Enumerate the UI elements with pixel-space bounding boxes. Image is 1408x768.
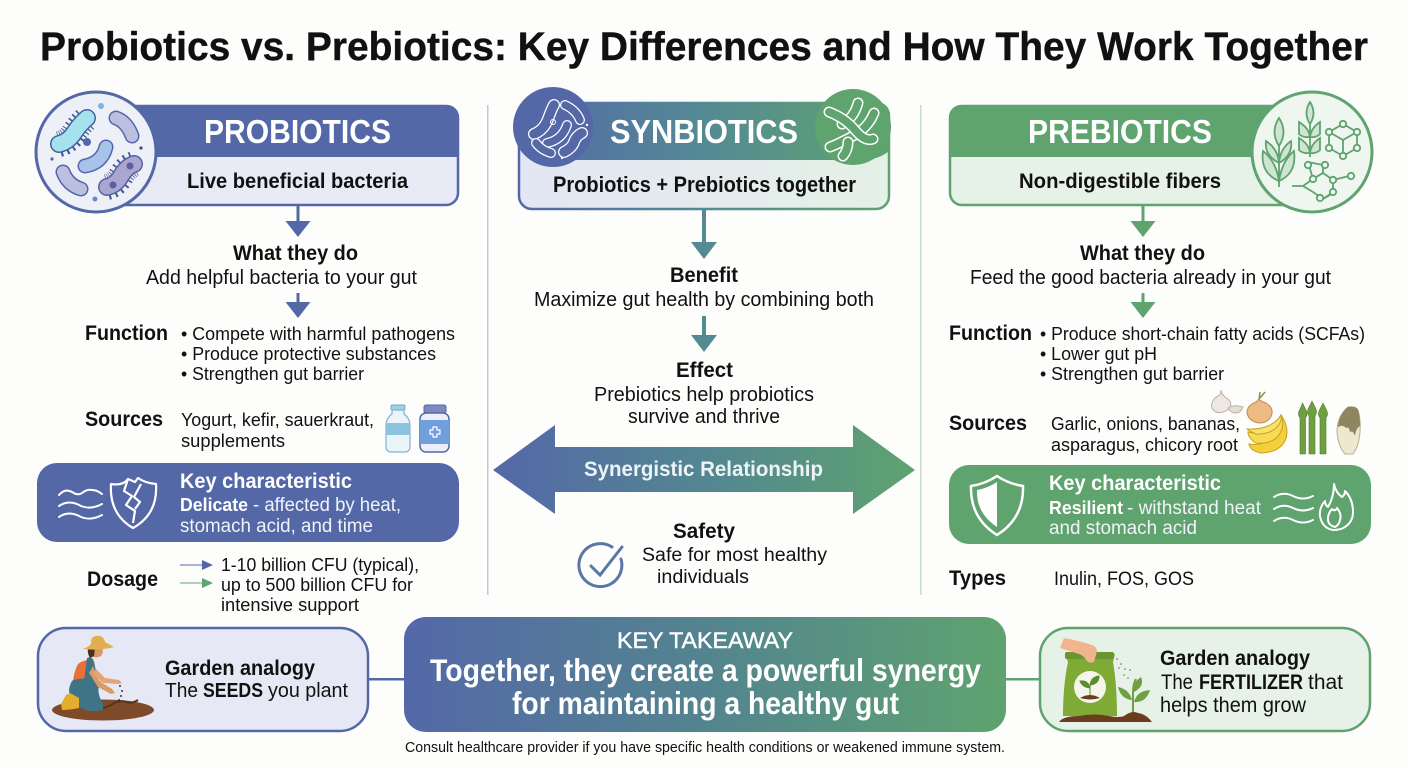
key characteristic card: Resilient: [1049, 497, 1123, 518]
safety text: Safe for most healthy: [642, 545, 828, 566]
icon: fiber outline circle: [815, 89, 891, 165]
arrow: synergistic relationship: Synergistic Relationship: [584, 458, 823, 481]
sources section: asparagus, chicory root: [1051, 434, 1238, 455]
icon: waves: [1274, 494, 1313, 522]
dosage section: 1-10 billion CFU (typical),: [221, 554, 419, 575]
synbiotics header card: [513, 87, 891, 209]
arrow: what they do to function: [1130, 293, 1156, 318]
function section: • Lower gut pH: [1040, 343, 1157, 364]
icon: flame: [1320, 484, 1353, 530]
types section: Types: [949, 567, 1006, 590]
arrow: benefit to effect: [691, 316, 717, 352]
probiotics header card: [110, 105, 459, 205]
synbiotics heading: SYNBIOTICS: [610, 113, 798, 150]
panel: key takeaway: KEY TAKEAWAY: [617, 628, 793, 653]
safety text: individuals: [657, 567, 749, 588]
sources section: [949, 390, 1360, 455]
icon: plants and molecules circle: [1252, 92, 1372, 212]
prebiotics header card: [949, 105, 1298, 205]
divider left: [487, 105, 488, 595]
title: Probiotics vs. Prebiotics: Key Differences and How They Work Together: [40, 25, 1368, 69]
dosage section: Dosage: [87, 568, 158, 591]
probiotics heading: PROBIOTICS: [204, 113, 391, 150]
key characteristic card: and stomach acid: [1049, 518, 1197, 539]
icon: check circle: [579, 544, 622, 587]
left analogy text: The: [165, 679, 198, 702]
types section: Inulin, FOS, GOS: [1054, 569, 1194, 590]
what they do text: Add helpful bacteria to your gut: [146, 267, 417, 289]
left analogy text: you plant: [268, 679, 348, 702]
what they do text: Feed the good bacteria already in your gut: [970, 267, 1331, 289]
icon: fertilizer bag and seedling: [1059, 638, 1152, 722]
arrow: header to what they do: [1130, 205, 1156, 237]
panel: key takeaway: [404, 617, 1006, 732]
function section: Function: [949, 322, 1032, 345]
connector: takeaway to right analogy: [1006, 678, 1040, 680]
icon: bananas: [1247, 415, 1287, 453]
icon: onion: [1247, 392, 1272, 423]
right analogy text: [1160, 646, 1343, 717]
icon: asparagus: [1298, 401, 1328, 454]
right analogy text: helps them grow: [1160, 694, 1307, 717]
synbiotics subtitle: Probiotics + Prebiotics together: [553, 172, 856, 197]
icon: cracked shield: [111, 478, 156, 528]
icon: chicory: [1337, 407, 1360, 454]
key characteristic card: Key characteristic: [1049, 472, 1221, 495]
function section: • Compete with harmful pathogens: [181, 323, 455, 344]
footer note: Consult healthcare provider if you have specific health conditions or weakened immune system.: [405, 740, 1005, 756]
probiotics subtitle: Live beneficial bacteria: [187, 170, 408, 193]
safety heading: Safety: [673, 520, 735, 543]
key characteristic card: - affected by heat,: [253, 495, 401, 516]
icon: gardener planting seeds: [52, 636, 154, 720]
function section: Function: [85, 322, 168, 345]
dosage section: intensive support: [221, 594, 359, 615]
function section: • Produce short-chain fatty acids (SCFAs): [1040, 323, 1365, 344]
arrow: header to what they do: [286, 205, 310, 237]
function section: • Strengthen gut barrier: [1040, 363, 1224, 384]
arrow: header to benefit: [691, 209, 717, 259]
icon: garlic: [1212, 390, 1243, 413]
right analogy text: that: [1308, 671, 1343, 694]
panel: right garden analogy: [1040, 628, 1370, 731]
right analogy text: FERTILIZER: [1199, 671, 1303, 694]
sources section: Sources: [85, 408, 163, 431]
effect heading: Effect: [676, 359, 733, 382]
panel: synbiotics column: [493, 87, 915, 588]
divider right: [920, 105, 922, 595]
dosage section: [87, 554, 419, 615]
benefit heading: Benefit: [670, 264, 738, 287]
key characteristic card: [949, 465, 1371, 544]
left analogy text: [165, 656, 348, 702]
icon: bacteria circle: [36, 92, 156, 212]
connector: left analogy to takeaway: [368, 678, 404, 680]
key characteristic card: stomach acid, and time: [180, 516, 373, 537]
effect text: survive and thrive: [628, 406, 780, 428]
icon: supplement jar: [420, 405, 449, 452]
key characteristic card: [37, 463, 459, 542]
what they do heading: What they do: [233, 242, 358, 265]
function section: [949, 322, 1365, 384]
safety text: [642, 545, 828, 588]
arrow: what they do to function: [286, 293, 310, 318]
arrow: synergistic relationship: [493, 425, 915, 514]
sources section: Sources: [949, 412, 1027, 435]
icon: shield: [971, 476, 1023, 535]
panel: left garden analogy: [38, 628, 368, 731]
function section: [85, 322, 455, 384]
panel: probiotics column: [36, 92, 459, 615]
prebiotics heading: PREBIOTICS: [1028, 113, 1212, 150]
prebiotics subtitle: Non-digestible fibers: [1019, 170, 1221, 193]
right analogy text: Garden analogy: [1160, 646, 1310, 670]
types section: [949, 567, 1194, 590]
key characteristic card: - withstand heat: [1127, 498, 1262, 519]
effect text: Prebiotics help probiotics: [594, 384, 814, 406]
sources section: supplements: [181, 430, 285, 451]
function section: • Produce protective substances: [181, 343, 436, 364]
panel: key takeaway: for maintaining a healthy gut: [512, 685, 899, 721]
what they do heading: What they do: [1080, 242, 1205, 265]
right analogy text: The: [1161, 671, 1193, 694]
icon: yogurt bottle: [386, 405, 410, 452]
sources section: Yogurt, kefir, sauerkraut,: [181, 409, 374, 430]
benefit text: Maximize gut health by combining both: [534, 289, 874, 311]
icon: green arrow: [180, 578, 213, 588]
panel: key takeaway: Together, they create a powerful synergy: [430, 652, 981, 688]
left analogy text: SEEDS: [203, 679, 263, 702]
sources section: Garlic, onions, bananas,: [1051, 413, 1240, 434]
dosage section: up to 500 billion CFU for: [221, 574, 413, 595]
icon: waves: [59, 490, 102, 519]
sources section: [85, 405, 449, 452]
icon: blue arrow: [180, 560, 213, 570]
left analogy text: Garden analogy: [165, 656, 315, 680]
key characteristic card: Delicate: [180, 494, 248, 515]
key characteristic card: Key characteristic: [180, 470, 352, 493]
panel: prebiotics column: [949, 92, 1372, 590]
effect text: [594, 384, 814, 428]
icon: bacteria outline circle: [513, 87, 593, 167]
function section: • Strengthen gut barrier: [181, 363, 364, 384]
